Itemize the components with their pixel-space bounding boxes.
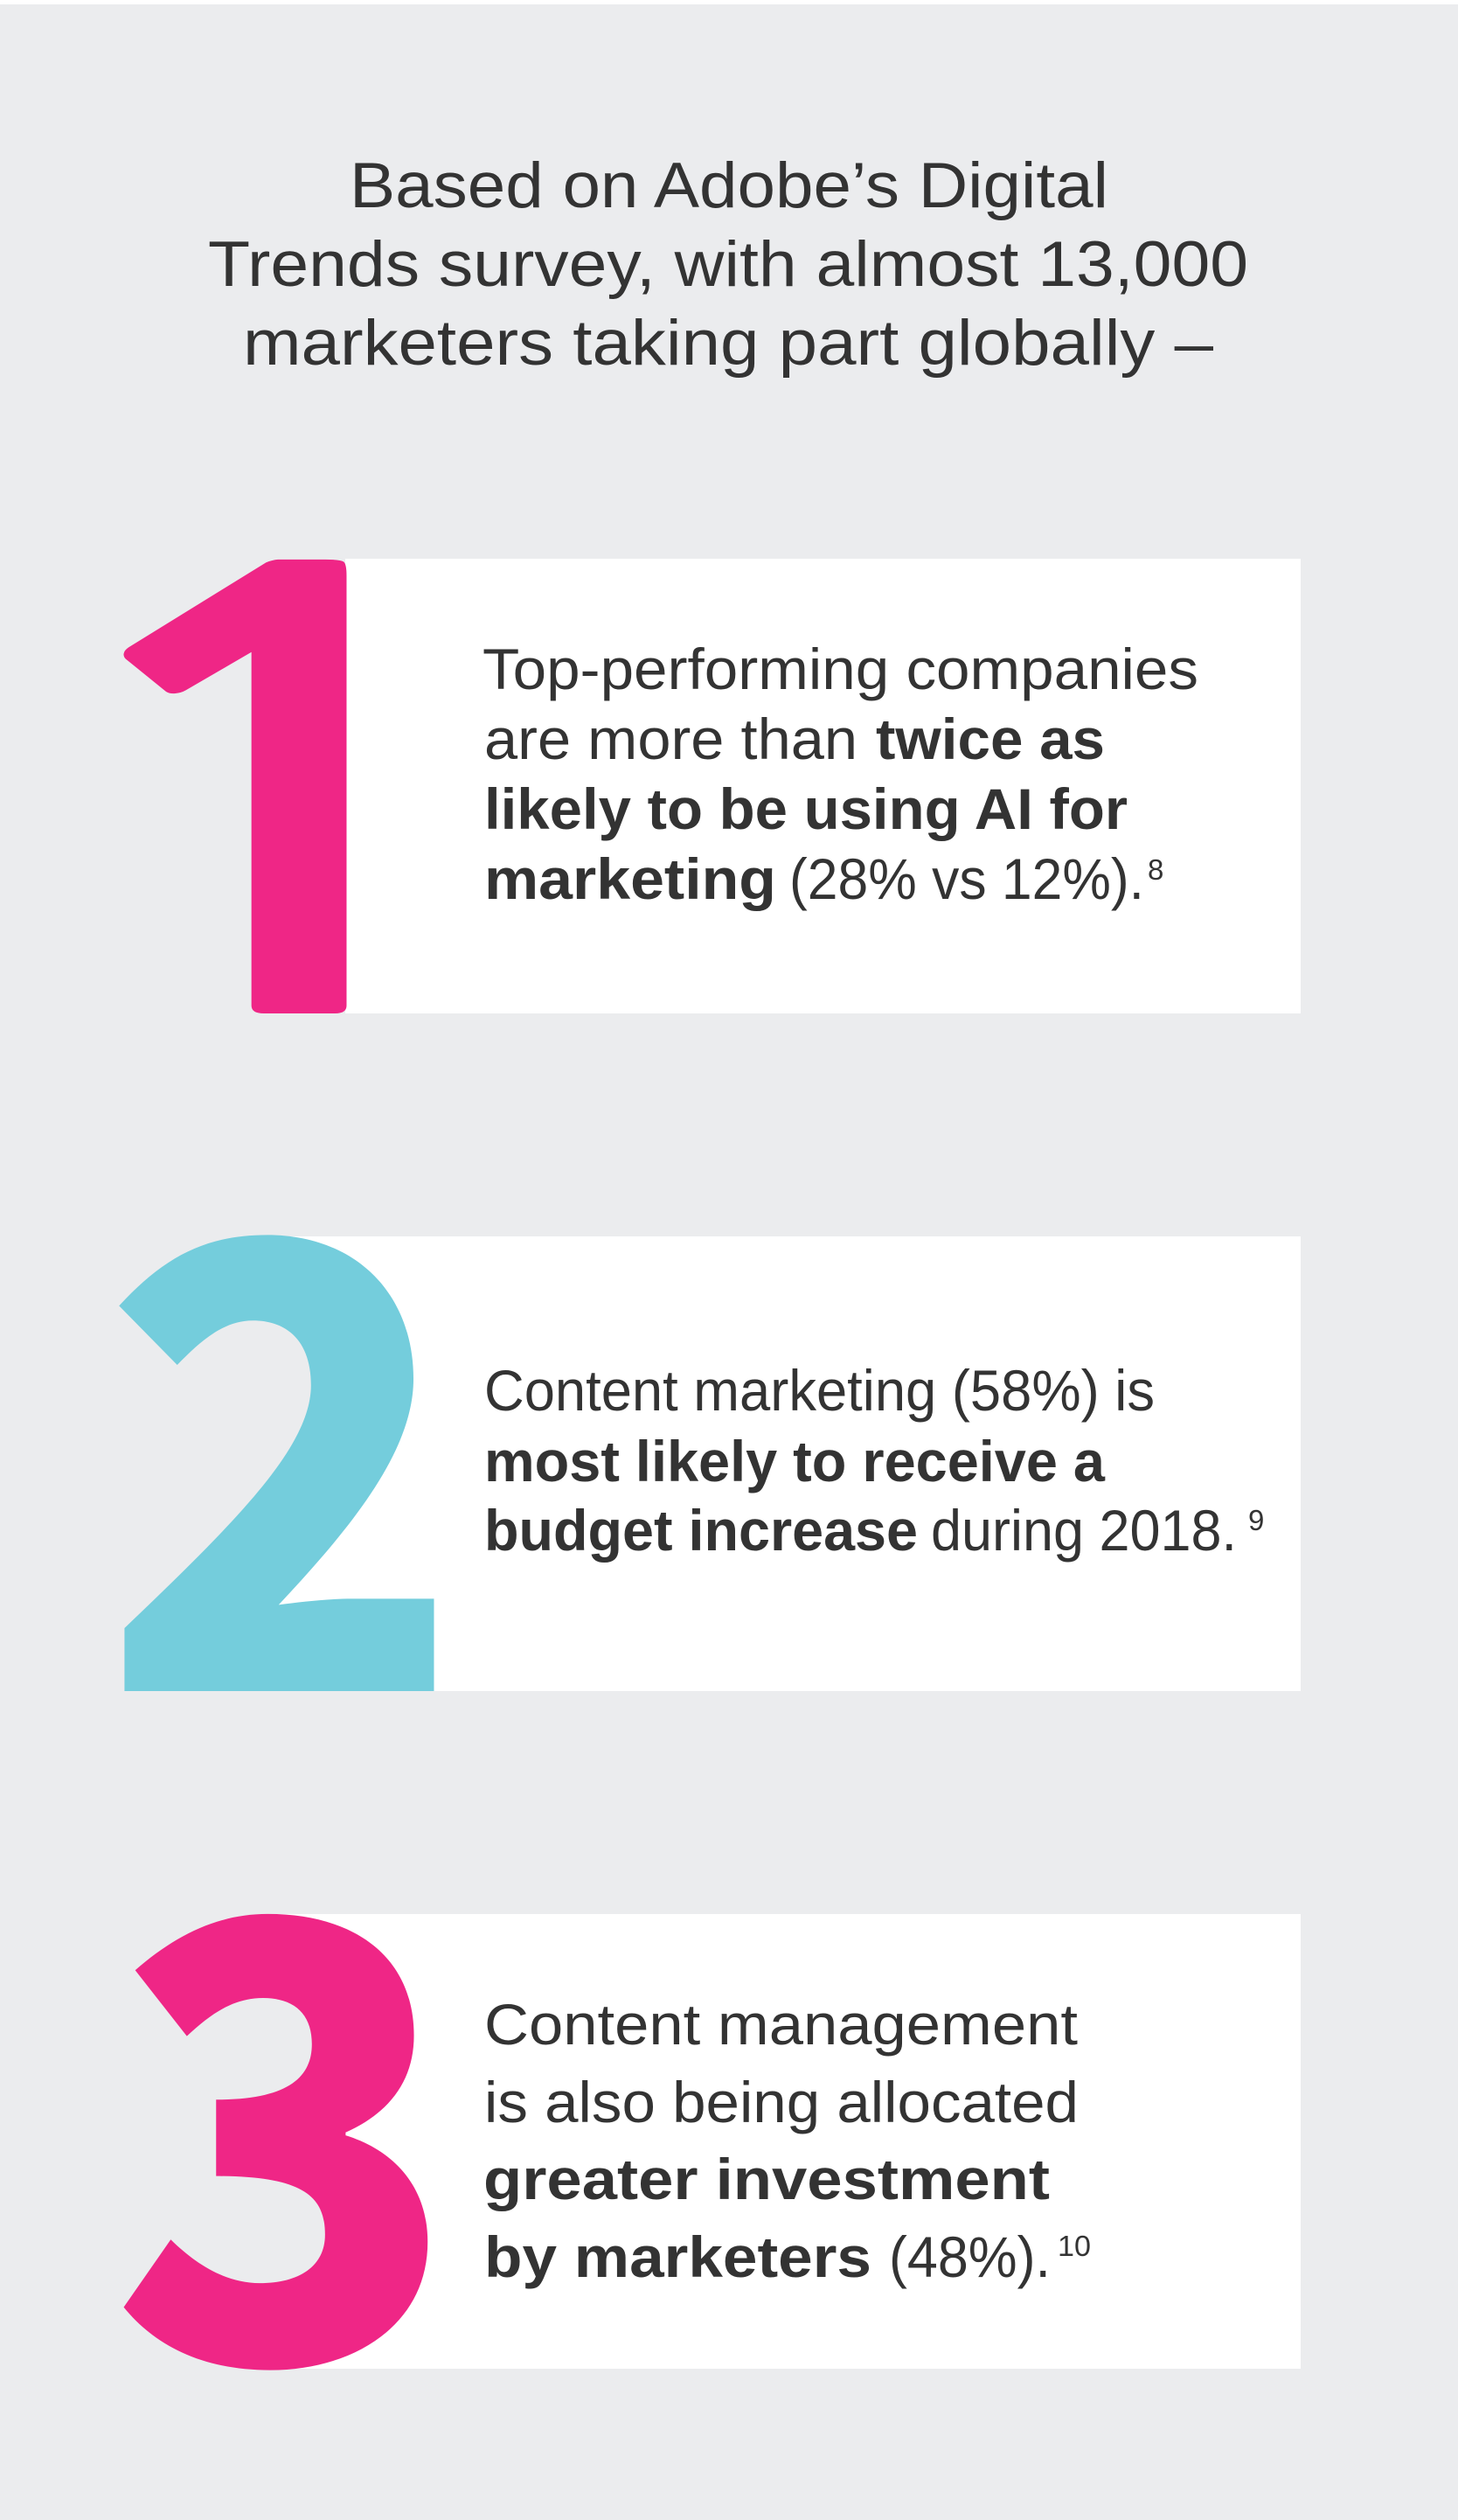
number 1: 1: [10, 510, 549, 1101]
text block: item 2: 9: [1248, 1504, 1264, 1536]
text block: item 1: likely to be using AI for: [484, 776, 1128, 841]
number 3: 3: [110, 1660, 459, 2520]
text block: item 1: are more than: [484, 707, 857, 771]
text block: item 2: budget increase: [484, 1498, 918, 1563]
text block: item 3: 10: [1058, 2230, 1091, 2262]
text block: item 1: marketing: [484, 846, 776, 911]
text block: item 1: Top-performing companies: [483, 637, 1198, 701]
title: Trends survey, with almost 13,000: [208, 229, 1248, 300]
text block: item 2: most likely to receive a: [484, 1429, 1106, 1493]
panel: item 3: [110, 1660, 1301, 2520]
text block: item 2: [484, 1358, 1264, 1563]
number 2: 2: [100, 977, 464, 1869]
title: [208, 150, 1248, 379]
panel: item 2: [100, 977, 1301, 1869]
text block: item 2: during 2018.: [931, 1498, 1237, 1563]
text block: item 2: Content marketing (58%) is: [484, 1358, 1155, 1423]
text block: item 3: greater investment: [483, 2147, 1050, 2211]
text block: item 1: twice as: [876, 707, 1105, 771]
text block: item 3: by marketers: [484, 2224, 871, 2289]
text block: item 3: Content management: [484, 1992, 1078, 2057]
text block: item 3: [483, 1992, 1091, 2289]
text block: item 1: [483, 637, 1198, 911]
text block: item 3: (48%).: [889, 2224, 1051, 2289]
text block: item 1: 8: [1148, 853, 1163, 886]
text block: item 1: (28% vs 12%).: [789, 846, 1144, 911]
title: Based on Adobe’s Digital: [350, 150, 1108, 221]
panel: item 1: [10, 510, 1301, 1101]
title: marketers taking part globally –: [243, 308, 1213, 379]
text block: item 3: is also being allocated: [484, 2070, 1079, 2134]
